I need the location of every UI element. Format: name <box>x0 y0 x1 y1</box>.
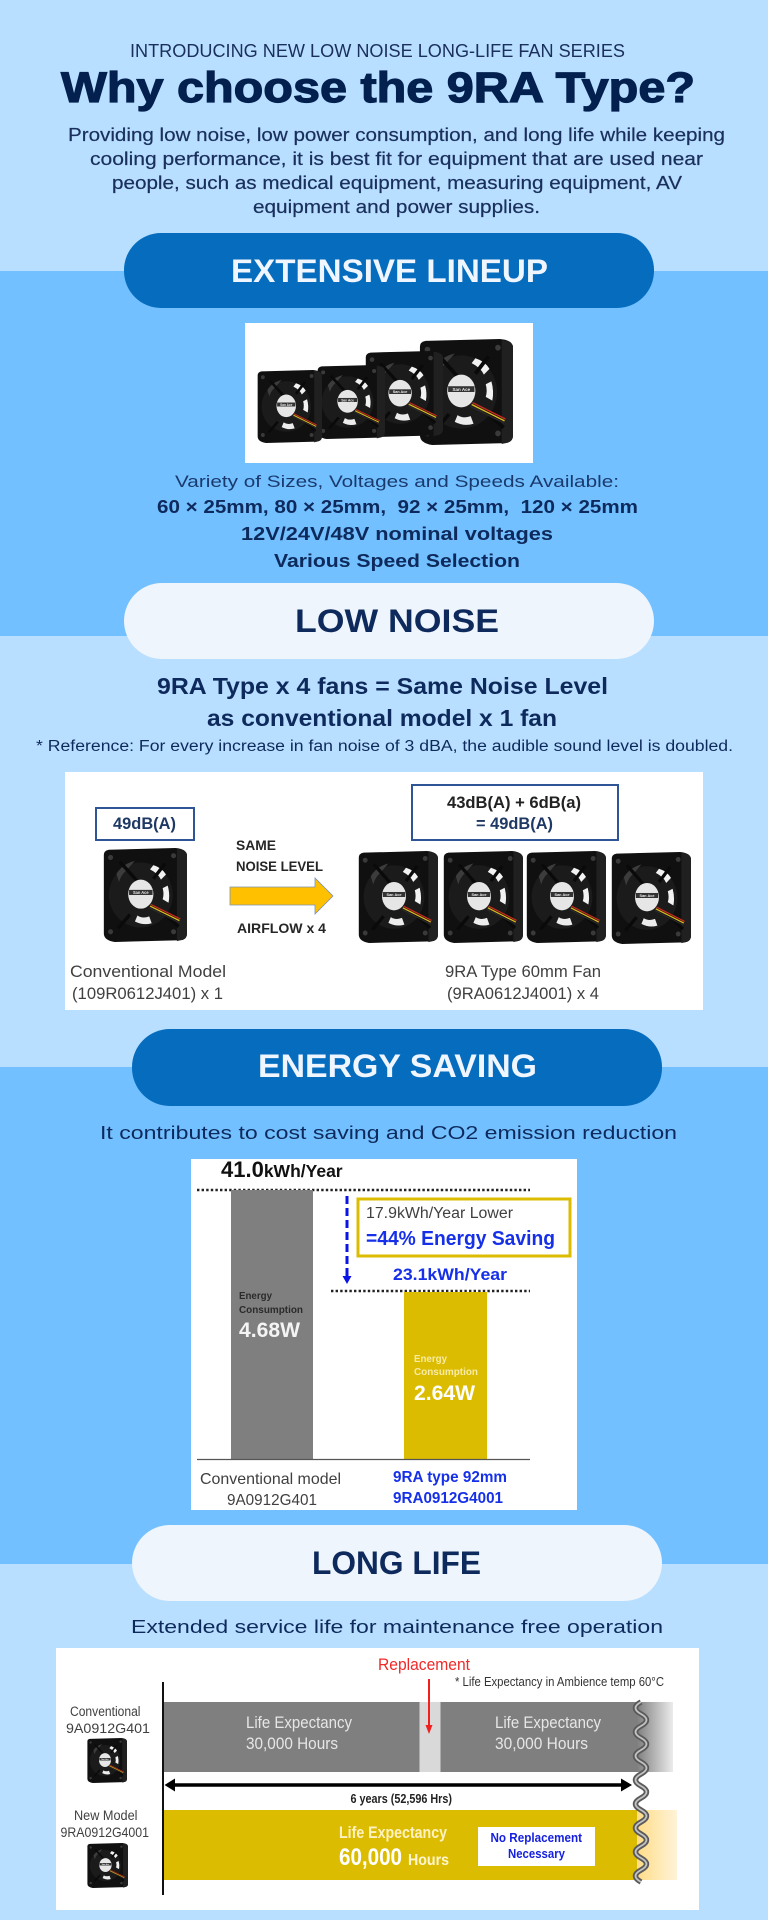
low noise headline: 9RA Type x 4 fans = Same Noise Level <box>157 673 608 699</box>
double arrow: six years <box>164 1778 632 1792</box>
four 9RA fan photos <box>359 851 691 944</box>
conventional value label: 41.0kWh/Year <box>221 1157 343 1182</box>
reference footnote: * Reference: For every increase in fan noise of 3 dBA, the audible sound level is doubled. <box>36 738 733 755</box>
timeline bar: new model: 60,000 <box>339 1844 402 1871</box>
9RA noise level box <box>412 785 618 840</box>
same noise level label: NOISE LEVEL <box>236 858 323 874</box>
heading pill: low noise: LOW NOISE <box>295 603 499 639</box>
intro paragraph: cooling performance, it is best fit for equipment that are used near <box>90 149 703 169</box>
bar: 9RA <box>404 1292 487 1459</box>
heading pill: energy saving <box>132 1029 662 1106</box>
heading pill: extensive lineup: EXTENSIVE LINEUP <box>231 253 548 289</box>
no replacement callout <box>478 1827 595 1866</box>
conventional fan photo <box>104 848 187 942</box>
conventional row label: 9A0912G401 <box>66 1720 150 1736</box>
bar: 9RA: Energy <box>414 1353 447 1365</box>
eyebrow heading: INTRODUCING NEW LOW NOISE LONG-LIFE FAN SERIES <box>130 41 625 61</box>
bar: 9RA: Consumption <box>414 1366 478 1378</box>
life expectancy timeline <box>56 1648 699 1910</box>
replacement label: Replacement <box>378 1655 470 1674</box>
timeline bar: conventional <box>164 1702 673 1772</box>
intro paragraph <box>68 125 725 217</box>
axis break wave <box>636 1702 646 1882</box>
bar: conventional: Consumption <box>239 1304 303 1316</box>
panel: low noise <box>36 583 733 1010</box>
timeline bar: conventional: Life Expectancy <box>495 1714 602 1732</box>
9RA axis label: 9RA type 92mm <box>393 1469 507 1486</box>
lineup specification text: Various Speed Selection <box>274 551 520 571</box>
conventional axis label: 9A0912G401 <box>227 1492 317 1509</box>
heading pill: long life: LONG LIFE <box>312 1545 481 1581</box>
9RA value label: 23.1kWh/Year <box>393 1265 507 1284</box>
no replacement callout: No Replacement <box>490 1831 583 1845</box>
same noise level label: SAME <box>236 837 276 853</box>
bar: conventional: Energy <box>239 1290 272 1302</box>
no replacement callout: Necessary <box>508 1847 565 1861</box>
9RA axis label: 9RA0912G4001 <box>393 1490 503 1507</box>
timeline bar: conventional: 30,000 Hours <box>495 1735 588 1753</box>
long life subheading: Extended service life for maintenance free operation <box>131 1617 663 1637</box>
low noise headline <box>157 673 608 731</box>
title: Why choose the 9RA Type? <box>61 64 695 112</box>
heading pill: low noise <box>124 583 654 659</box>
9RA model caption: 9RA Type 60mm Fan <box>445 962 601 981</box>
panel: extensive lineup <box>124 233 654 571</box>
conventional row label: Conventional <box>70 1704 140 1719</box>
lineup specification text <box>157 472 638 571</box>
9RA model caption <box>445 962 601 1003</box>
arrow: replacement point <box>426 1679 432 1734</box>
timeline bar: conventional: Life Expectancy <box>246 1714 353 1732</box>
conventional model caption <box>70 962 226 1003</box>
arrow: conventional to 9RA <box>230 878 333 914</box>
panel: long life <box>56 1525 699 1910</box>
9RA axis label <box>393 1469 507 1507</box>
panel: energy saving <box>100 1029 677 1510</box>
timeline bar: new model: Hours <box>408 1852 449 1869</box>
heading pill: long life <box>132 1525 662 1601</box>
six years label: 6 years (52,596 Hrs) <box>350 1792 452 1806</box>
airflow label: AIRFLOW x 4 <box>237 920 326 936</box>
bar: 9RA: 2.64W <box>414 1382 475 1405</box>
lineup specification text: Variety of Sizes, Voltages and Speeds Available: <box>175 472 619 491</box>
conventional model caption: Conventional Model <box>70 962 226 981</box>
timeline bar: new model <box>164 1810 677 1880</box>
conventional noise level box <box>96 808 194 840</box>
product photo: four fan sizes <box>245 323 533 463</box>
new model row label: 9RA0912G4001 <box>60 1824 149 1840</box>
heading pill: extensive lineup <box>124 233 654 308</box>
lineup specification text: 60 × 25mm, 80 × 25mm, 92 × 25mm, 120 × 25mm <box>157 497 638 517</box>
energy bar chart <box>191 1157 577 1510</box>
new model row label <box>60 1808 149 1888</box>
9RA noise level box: = 49dB(A) <box>476 814 553 833</box>
timeline axis <box>162 1682 164 1895</box>
bar: conventional: 4.68W <box>239 1319 300 1342</box>
heading pill: energy saving: ENERGY SAVING <box>258 1048 537 1084</box>
same noise level label <box>236 837 323 874</box>
conventional row label <box>66 1704 150 1783</box>
intro paragraph: people, such as medical equipment, measuring equipment, AV <box>112 173 682 193</box>
header <box>61 41 725 217</box>
arrow: reduction <box>342 1196 352 1284</box>
energy saving subheading: It contributes to cost saving and CO2 emission reduction <box>100 1123 677 1143</box>
conventional noise level box: 49dB(A) <box>113 815 176 833</box>
ambient temperature note: * Life Expectancy in Ambience temp 60°C <box>455 1675 664 1689</box>
savings callout: =44% Energy Saving <box>366 1228 555 1250</box>
intro paragraph: Providing low noise, low power consumption, and long life while keeping <box>68 125 725 145</box>
lineup specification text: 12V/24V/48V nominal voltages <box>241 524 553 544</box>
savings callout: 17.9kWh/Year Lower <box>366 1205 513 1222</box>
savings callout <box>358 1199 570 1256</box>
intro paragraph: equipment and power supplies. <box>253 197 540 217</box>
bar: conventional <box>231 1190 313 1459</box>
timeline bar: new model: Life Expectancy <box>339 1824 448 1842</box>
new model row label: New Model <box>74 1808 138 1823</box>
9RA model caption: (9RA0612J4001) x 4 <box>447 984 599 1003</box>
conventional axis label: Conventional model <box>200 1471 341 1488</box>
9RA noise level box: 43dB(A) + 6dB(a) <box>447 793 581 812</box>
low noise headline: as conventional model x 1 fan <box>207 705 557 731</box>
conventional model caption: (109R0612J401) x 1 <box>72 984 223 1003</box>
conventional axis label <box>200 1471 341 1509</box>
timeline bar: conventional: 30,000 Hours <box>246 1735 338 1753</box>
noise comparison diagram <box>65 772 703 1010</box>
